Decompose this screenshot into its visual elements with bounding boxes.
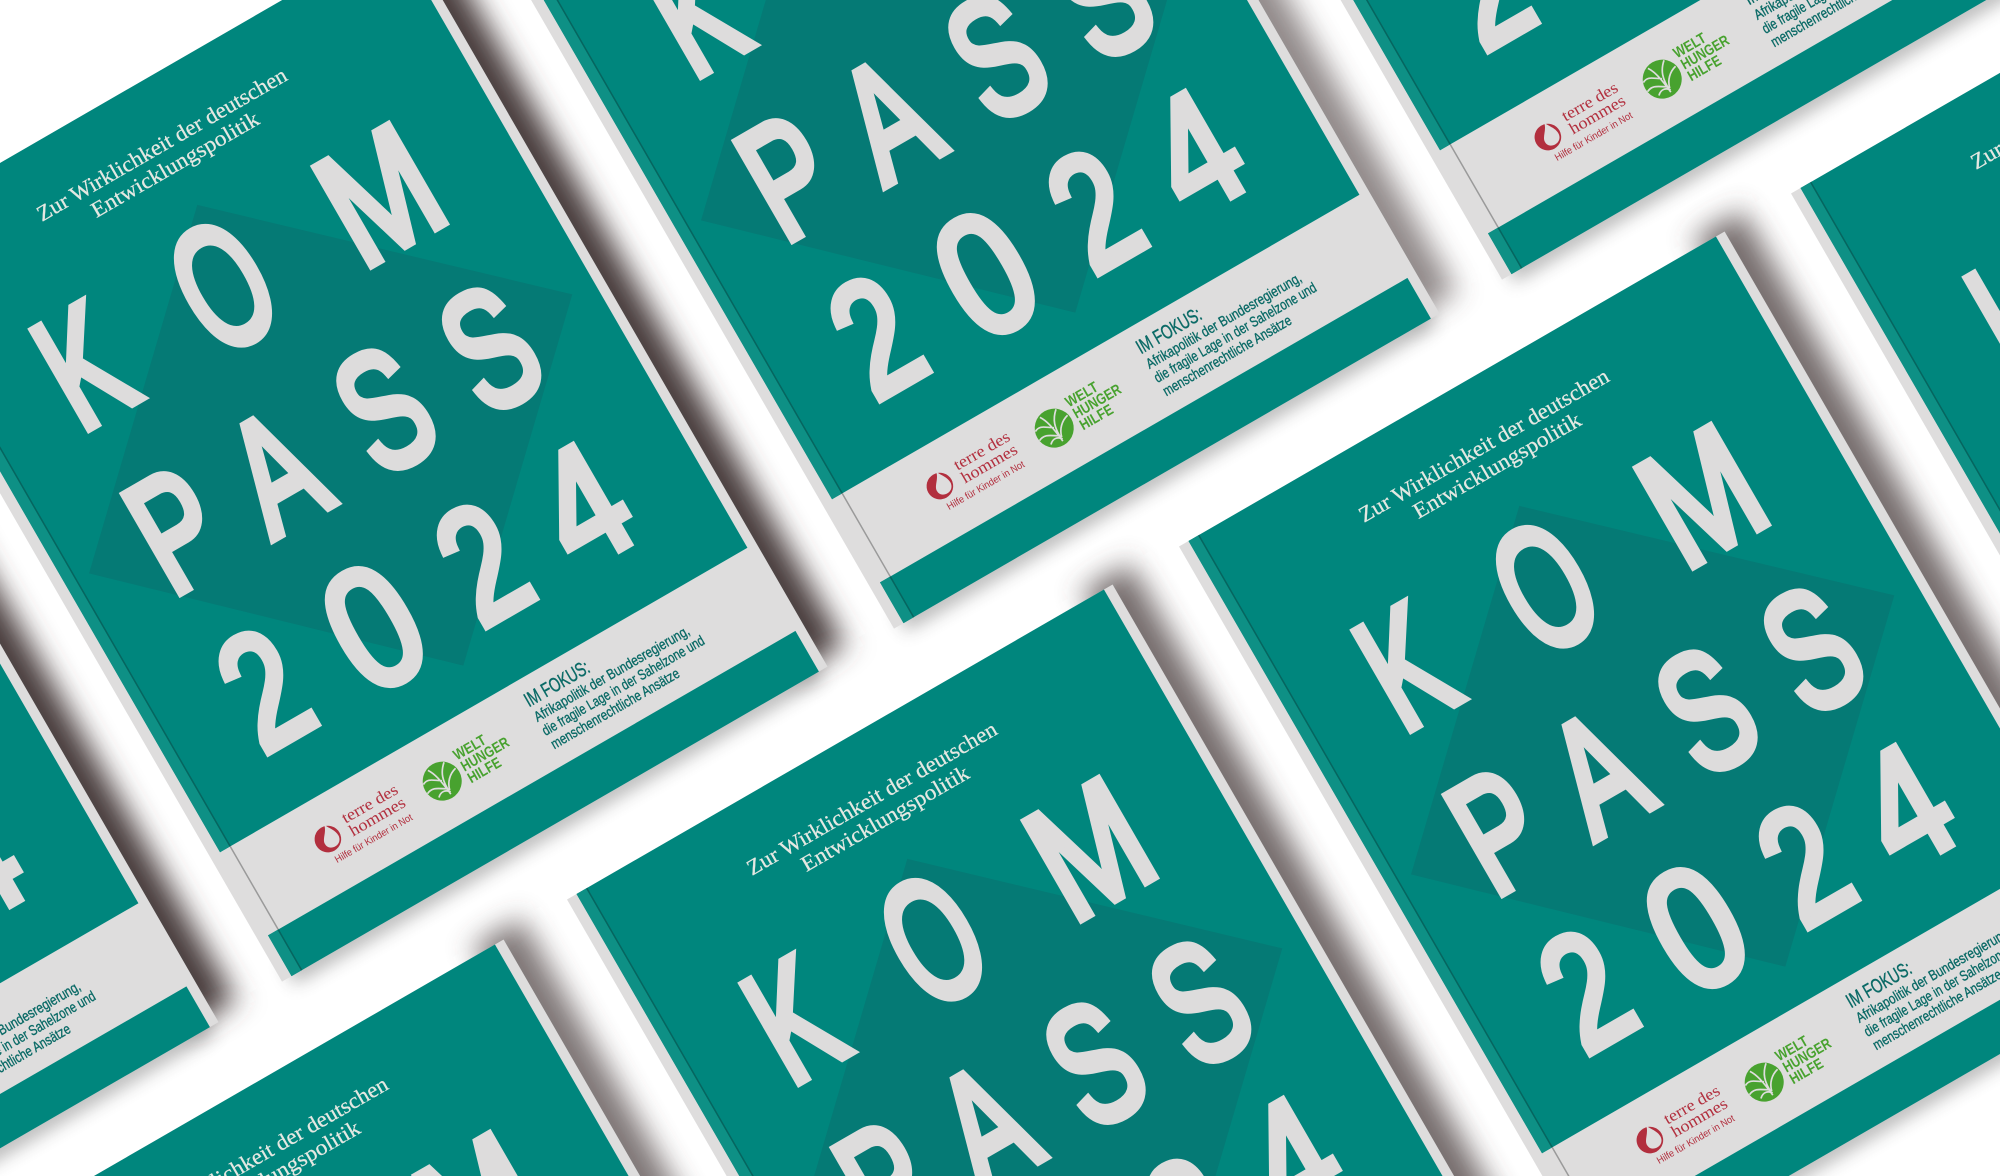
focus text: Afrikapolitik der Bundesregierung, — [531, 623, 693, 726]
logo: terre des hommes: hommes — [1668, 1094, 1731, 1141]
title row: KOM — [714, 738, 1185, 1123]
title row: PASS — [98, 249, 570, 630]
logo: terre des hommes: terre des — [1558, 78, 1621, 125]
logo: Welthungerhilfe — [1026, 369, 1131, 456]
subtitle: Zur Wirklichkeit der deutschen — [742, 716, 1001, 880]
logo: Welthungerhilfe: WELT — [1670, 30, 1709, 62]
subtitle: Zur Wirklichkeit der deutschen — [1354, 363, 1613, 527]
book cover: top middle — [464, 0, 1466, 636]
book cover: top left — [0, 0, 854, 989]
title row: PASS: A — [199, 374, 354, 569]
title row: 2024: 4 — [1117, 54, 1273, 250]
title row: 2024 — [799, 51, 1276, 437]
title row: 2024: 2 — [407, 467, 558, 659]
title row: 2024: 4 — [505, 407, 661, 603]
logo: Welthungerhilfe: WELT — [450, 732, 489, 764]
logo: terre des hommes — [919, 427, 1028, 517]
logo: Welthungerhilfe: HILFE — [1787, 1055, 1826, 1088]
focus text: die fragile Lage in der Sahelzone und — [539, 633, 708, 739]
title row: 2024: 4 — [1827, 708, 1983, 904]
title row: KOM: O — [848, 834, 1018, 1045]
logo: terre des hommes: Hilfe für Kinder in Not — [1655, 1113, 1737, 1167]
logo: Welthungerhilfe — [1634, 20, 1739, 107]
logo: terre des hommes: terre des — [338, 780, 401, 827]
title row: PASS: S — [1627, 611, 1787, 811]
focus text: die fragile Lage in der Sahelzone und — [1151, 280, 1320, 386]
title row: PASS: S — [411, 249, 570, 449]
subtitle: Entwicklungspolitik — [86, 106, 263, 222]
subtitle: Entwicklungspolitik — [796, 760, 973, 876]
title row: KOM: K — [718, 924, 871, 1117]
book cover: bottom middle — [562, 563, 1560, 1176]
logo: Welthungerhilfe: WELT — [1062, 379, 1101, 411]
title row: 2024: 0 — [1613, 824, 1779, 1031]
title row: 2024: 2 — [189, 593, 340, 785]
logo: Welthungerhilfe: WELT — [1772, 1033, 1811, 1065]
logo: terre des hommes — [1629, 1081, 1738, 1171]
title row: 2024 — [1509, 705, 1986, 1091]
title row: KOM: K — [8, 270, 161, 463]
title row: KOM — [4, 84, 475, 469]
focus text: IM FOKUS: — [520, 657, 594, 712]
logo: Welthungerhilfe: HUNGER — [1070, 381, 1125, 422]
book cover: bottom left — [0, 918, 951, 1176]
book cover: lower right — [1174, 210, 2000, 1176]
title row: KOM: M — [289, 90, 471, 300]
title row: KOM: K — [1330, 571, 1483, 764]
logo: Welthungerhilfe: HUNGER — [1678, 32, 1733, 73]
logo: terre des hommes: terre des — [1660, 1081, 1723, 1128]
logo: terre des hommes — [1527, 78, 1636, 168]
title row: 2024: 2 — [1511, 894, 1662, 1086]
title row: 2024: 2 — [1729, 768, 1880, 960]
dark diamond — [667, 719, 1416, 1176]
title row: KOM — [616, 0, 1087, 116]
title row: PASS: S — [1015, 964, 1175, 1164]
focus text: menschenrechtliche Ansätze — [1160, 313, 1295, 400]
title row: PASS: A — [811, 21, 966, 216]
logo: Welthungerhilfe: HILFE — [1077, 401, 1116, 434]
focus text: IM FOKUS: — [1132, 304, 1206, 359]
logo: terre des hommes: Hilfe für Kinder in Not — [333, 812, 415, 866]
title row: 2024: 0 — [903, 170, 1069, 377]
title row: PASS — [808, 903, 1280, 1176]
title row: PASS: S — [305, 310, 465, 510]
focus text: Afrikapolitik der Bundesregierung, — [1143, 270, 1305, 373]
logo: terre des hommes: Hilfe für Kinder in Not — [945, 459, 1027, 513]
title row: KOM — [1326, 385, 1797, 770]
title row: KOM: M — [1611, 391, 1793, 601]
logo: Welthungerhilfe: HILFE — [1685, 52, 1724, 85]
title row: KOM: O — [138, 180, 308, 391]
logo: terre des hommes: hommes — [346, 793, 409, 840]
title row: 2024: 2 — [801, 240, 952, 432]
dark diamond — [1279, 366, 2000, 1106]
dark diamond — [0, 65, 706, 805]
title row: PASS: P — [98, 433, 254, 627]
logo: terre des hommes — [307, 780, 416, 870]
logo: Welthungerhilfe — [414, 722, 519, 809]
title row: PASS — [1420, 550, 1892, 931]
logo: Welthungerhilfe — [1736, 1023, 1841, 1110]
subtitle: Zur Wirklichkeit der deutschen — [32, 62, 291, 226]
dark diamond — [58, 1074, 807, 1176]
title row: 2024 — [897, 1058, 1374, 1176]
book cover: top right — [1072, 0, 2000, 287]
title row: PASS: P — [1420, 734, 1576, 928]
focus text: IM FOKUS: — [1842, 958, 1916, 1013]
logo: Welthungerhilfe: HILFE — [465, 754, 504, 787]
title row: PASS — [710, 0, 1182, 277]
logo: terre des hommes: terre des — [950, 427, 1013, 474]
subtitle: Entwicklungspolitik — [1408, 407, 1585, 523]
title row: KOM: M — [999, 744, 1181, 954]
title row: 2024: 2 — [1019, 114, 1170, 306]
dark diamond — [569, 0, 1318, 452]
title row: PASS: A — [1521, 675, 1676, 870]
title row: 2024 — [1407, 0, 1884, 88]
book cover: far right — [1791, 0, 2000, 930]
title row: KOM: O — [1460, 481, 1630, 692]
logo: terre des hommes: hommes — [1566, 91, 1629, 138]
focus text: menschenrechtliche Ansätze — [548, 666, 683, 753]
logo: terre des hommes: hommes — [958, 440, 1021, 487]
logo: terre des hommes: Hilfe für Kinder in Not — [1553, 110, 1635, 164]
logo: Welthungerhilfe: HUNGER — [458, 734, 513, 775]
title row: PASS: S — [1121, 903, 1280, 1103]
title row: 2024: 0 — [291, 523, 457, 730]
title row: 2024 — [187, 404, 664, 790]
title row: PASS: P — [710, 80, 866, 274]
title row: PASS: S — [1733, 550, 1892, 750]
book cover: far left — [0, 264, 245, 1176]
logo: Welthungerhilfe: HUNGER — [1780, 1035, 1835, 1076]
